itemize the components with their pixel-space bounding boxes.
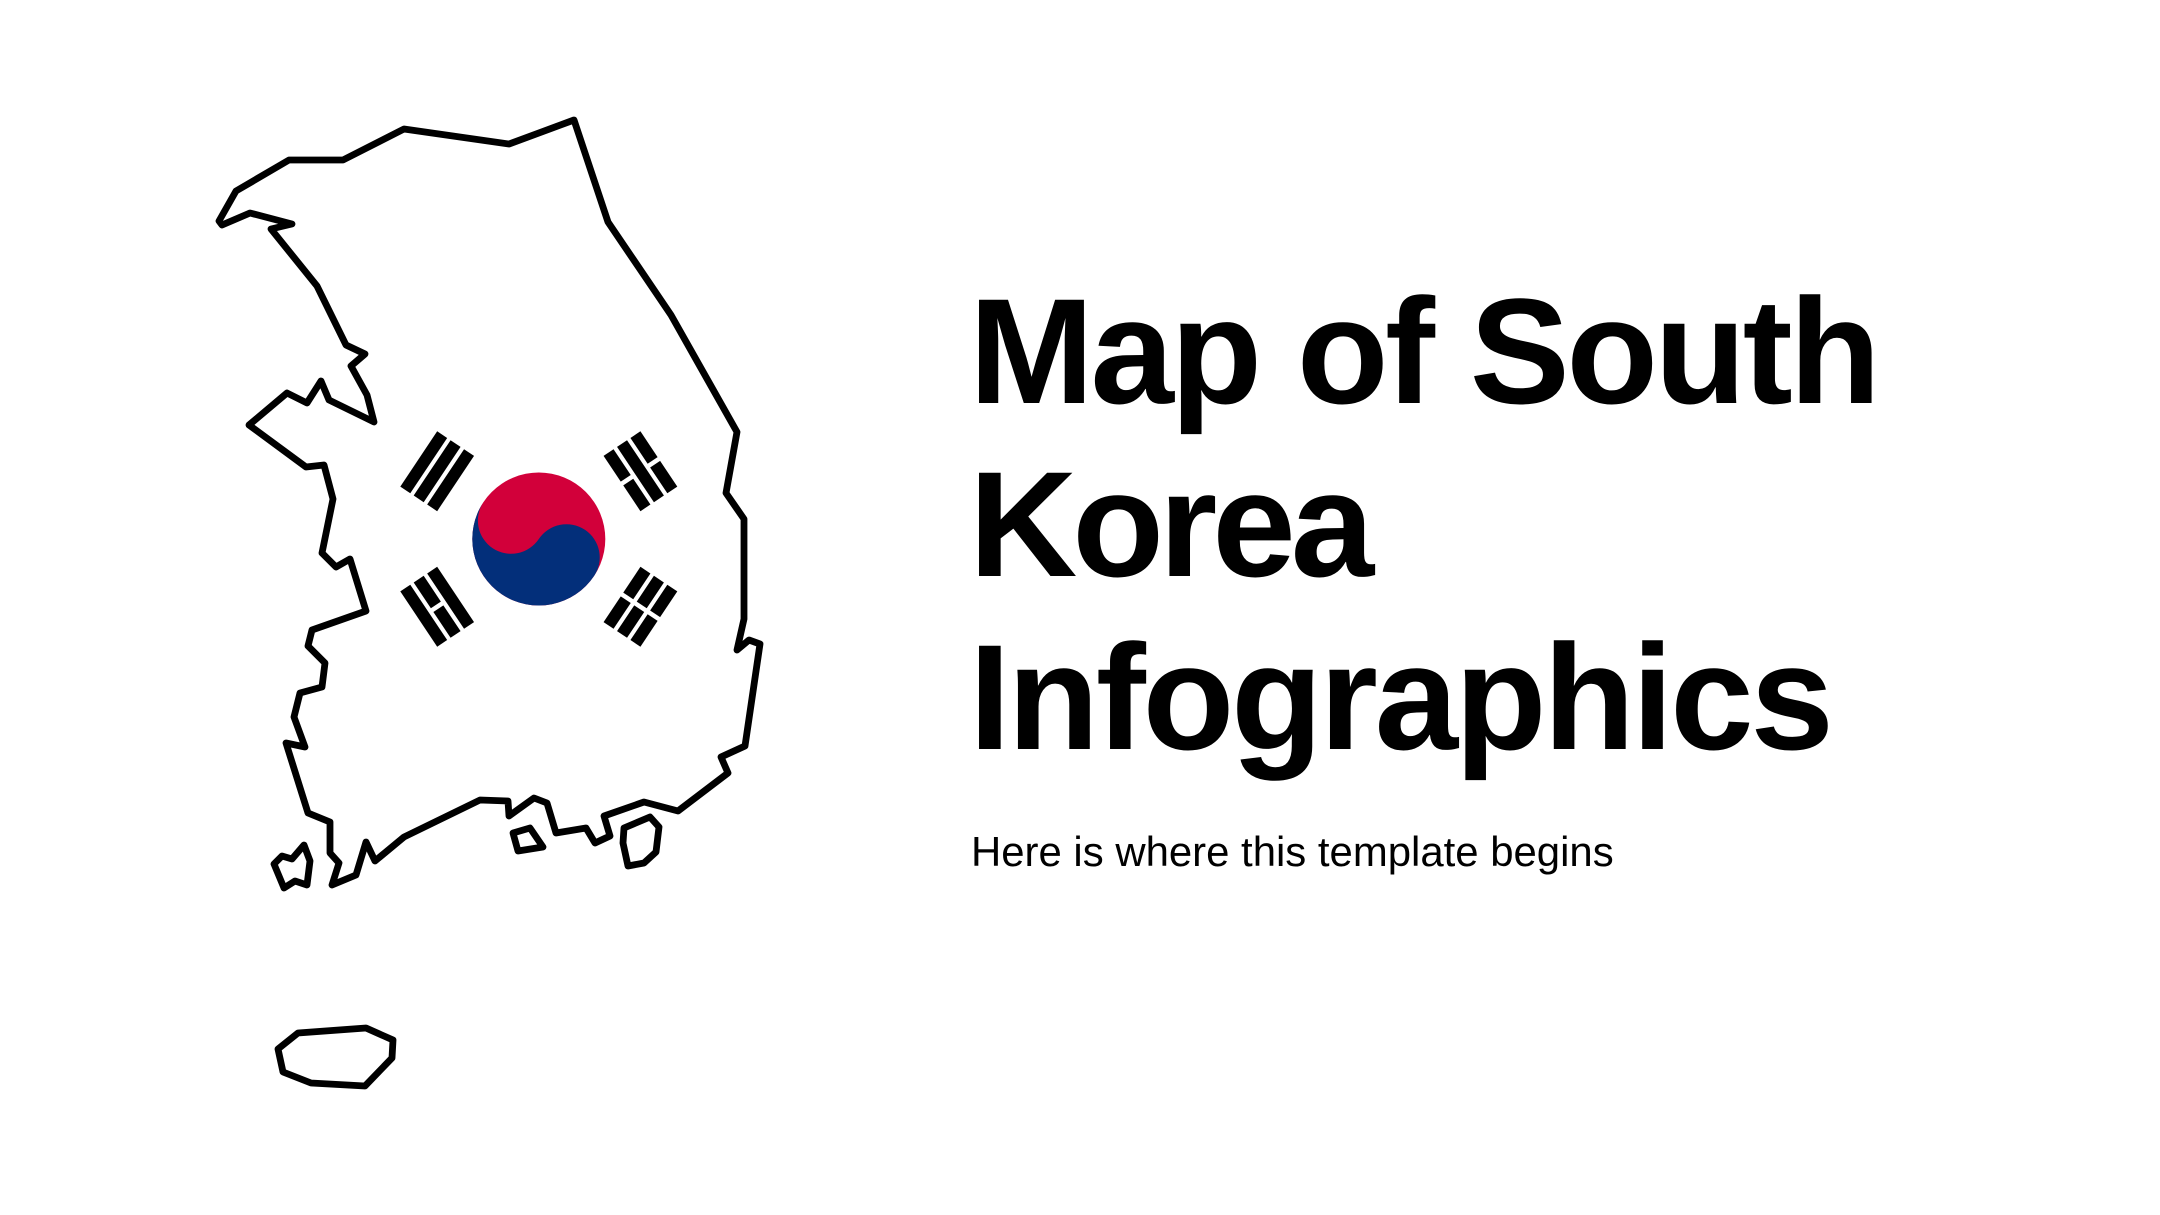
trigram: upper left [400, 431, 474, 511]
island: southeast [623, 817, 659, 866]
title: Korea [969, 440, 1369, 608]
island: west [274, 845, 310, 888]
title [969, 267, 1877, 781]
title: Infographics [969, 613, 1831, 781]
island: south central [513, 828, 543, 851]
trigram: upper right [604, 431, 677, 511]
subtitle: Here is where this template begins [971, 828, 1614, 875]
flag emblem [400, 431, 677, 647]
mainland outline [219, 120, 760, 885]
island: Jeju [278, 1028, 393, 1086]
title: Map of South [969, 267, 1877, 435]
trigram: lower right [604, 567, 677, 647]
taeguk circle [447, 447, 631, 631]
trigram: lower left [400, 567, 474, 647]
